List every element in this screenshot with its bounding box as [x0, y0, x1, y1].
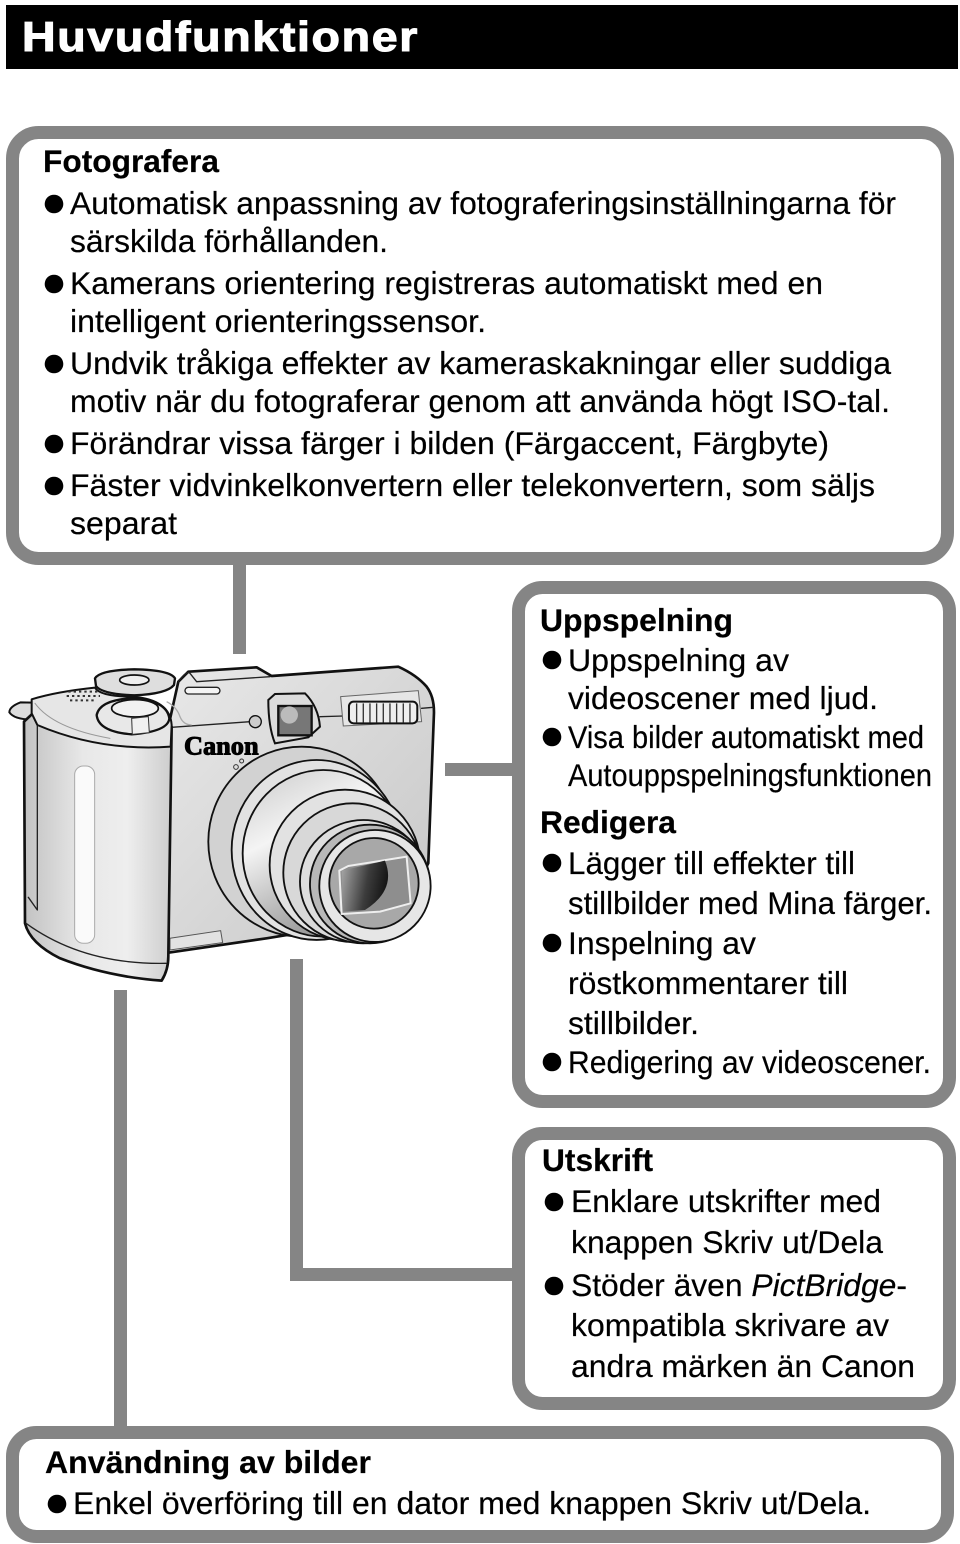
panel: Användning av bilder [12, 1432, 948, 1536]
panel: Utskrift: kompatibla skrivare av [571, 1307, 889, 1343]
panel: Fotografera: Fotografera [43, 143, 219, 179]
panel: Fotografera: Fäster vidvinkelkonvertern eller telekonvertern, som säljs [70, 467, 875, 503]
panel: Utskrift [518, 1134, 950, 1404]
panel: Utskrift: Stöder även PictBridge- [571, 1267, 907, 1303]
panel: Fotografera: motiv när du fotograferar genom att använda högt ISO-tal. [70, 383, 890, 419]
panel: Uppspelning and Redigera: Uppspelning av [568, 642, 789, 678]
panel: Fotografera: särskilda förhållanden. [70, 223, 388, 259]
panel: Utskrift: Enklare utskrifter med [571, 1183, 881, 1219]
panel: Användning av bilder: Enkel överföring till en dator med knappen Skriv ut/Dela. [73, 1485, 871, 1521]
panel: Fotografera: intelligent orienteringssensor. [70, 303, 486, 339]
swoosh behind shutter [167, 702, 192, 725]
viewfinder [268, 693, 320, 743]
panel: Uppspelning and Redigera: röstkommentarer till [568, 965, 848, 1001]
panel: Uppspelning and Redigera: Redigering av videoscener. [568, 1044, 931, 1080]
panel: Uppspelning and Redigera: Autouppspelningsfunktionen [568, 757, 932, 793]
panel: Fotografera: separat [70, 505, 177, 541]
flash window slit [185, 687, 220, 694]
panel: Uppspelning and Redigera: Visa bilder automatiskt med [568, 719, 924, 755]
panel: Uppspelning and Redigera: Uppspelning [540, 602, 733, 638]
microphone holes [234, 759, 244, 769]
shutter button [97, 698, 169, 734]
camera illustration [9, 667, 434, 981]
panel: Fotografera: Kamerans orientering registreras automatiskt med en [70, 265, 823, 301]
panel: Uppspelning and Redigera: stillbilder med Mina färger. [568, 885, 932, 921]
panel: Uppspelning and Redigera [518, 588, 950, 1102]
panel: Utskrift: knappen Skriv ut/Dela [571, 1224, 883, 1260]
grip highlight strip [75, 766, 95, 943]
AF lamp [249, 716, 261, 728]
panel: Uppspelning and Redigera: stillbilder. [568, 1005, 699, 1041]
panel: Fotografera: Undvik tråkiga effekter av kameraskakningar eller suddiga [70, 345, 891, 381]
Canon logo: Canon [184, 731, 259, 760]
title bar: Huvudfunktioner [22, 13, 419, 60]
panel: Utskrift: andra märken än Canon [571, 1348, 915, 1384]
bottom plate [170, 931, 223, 950]
mode dial [95, 669, 175, 695]
top plate swoosh [35, 703, 110, 738]
grip [24, 707, 172, 981]
panel: Fotografera: Förändrar vissa färger i bilden (Färgaccent, Färgbyte) [70, 425, 829, 461]
panel: Fotografera [12, 132, 948, 558]
panel: Uppspelning and Redigera: Redigera [540, 804, 676, 840]
panel: Uppspelning and Redigera: Inspelning av [568, 925, 756, 961]
panel: Utskrift: Utskrift [542, 1142, 654, 1178]
speaker dots [67, 692, 100, 700]
lens [208, 747, 431, 943]
connector lines [114, 560, 518, 1430]
panel: Uppspelning and Redigera: Lägger till effekter till [568, 845, 855, 881]
panel: Fotografera: Automatisk anpassning av fotograferingsinställningarna för [70, 185, 896, 221]
flash [341, 691, 422, 726]
body details [172, 673, 433, 727]
panel: Uppspelning and Redigera: videoscener med ljud. [568, 680, 878, 716]
strap lug [9, 702, 37, 720]
grip top plate [32, 688, 172, 747]
camera body [168, 667, 434, 953]
title bar [6, 5, 958, 69]
grip lines [26, 726, 166, 963]
panel: Användning av bilder: Användning av bilder [45, 1444, 371, 1480]
